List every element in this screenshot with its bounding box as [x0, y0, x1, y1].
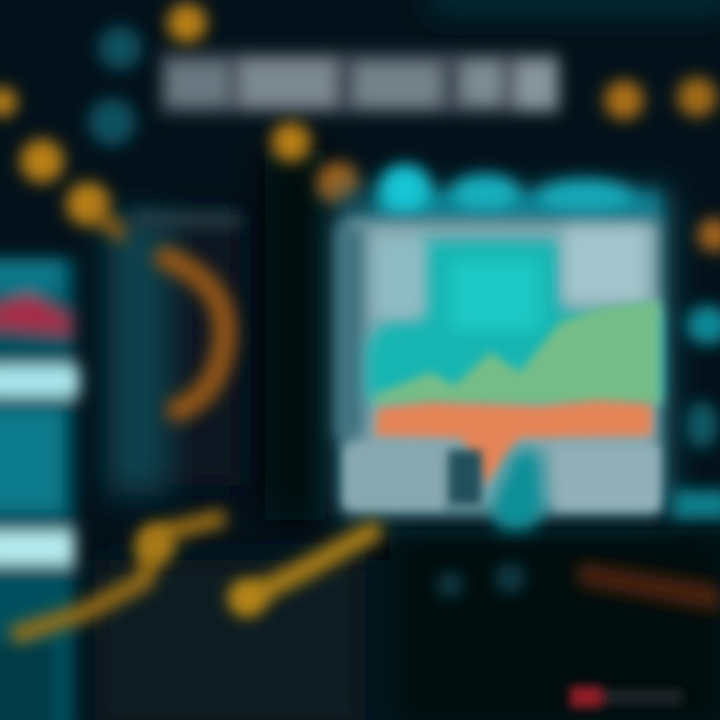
- left column red marker: [0, 296, 72, 333]
- chart: bottom right box: [555, 446, 659, 510]
- right side teal blobs: [672, 305, 720, 520]
- chart header tabs: [375, 164, 660, 220]
- chart: green area: [375, 300, 660, 405]
- chart: bottom dark gap: [448, 450, 482, 505]
- teal dots: [88, 26, 142, 146]
- left column bright band top: [0, 366, 80, 396]
- panel: left column: [0, 258, 80, 720]
- lower teal dots: [437, 563, 525, 598]
- yellow connector right: [248, 532, 372, 598]
- chart background: [345, 220, 660, 512]
- yellow connector left: [12, 517, 225, 636]
- chart: orange area: [375, 400, 652, 486]
- bottom badge: [570, 686, 682, 708]
- chart: top right box: [564, 228, 646, 302]
- chart: teal foot: [490, 450, 545, 530]
- yellow node: [135, 525, 175, 565]
- left column bright band bottom: [0, 532, 75, 564]
- chart: bright centre: [450, 260, 540, 330]
- chart left strip: [335, 225, 365, 440]
- chart glow: [335, 190, 670, 515]
- chart: teal area: [366, 240, 660, 400]
- yellow node right: [228, 579, 266, 617]
- chart: top left box: [376, 238, 426, 318]
- arc gauge: [166, 258, 225, 410]
- bottom orange band: [578, 562, 720, 612]
- chart: bottom left box: [344, 446, 444, 508]
- chart panel: [335, 164, 670, 530]
- panel: middle dark teal: [108, 215, 240, 495]
- title: [160, 52, 560, 114]
- orange dots: [0, 3, 720, 252]
- panel heading bar: [130, 212, 240, 226]
